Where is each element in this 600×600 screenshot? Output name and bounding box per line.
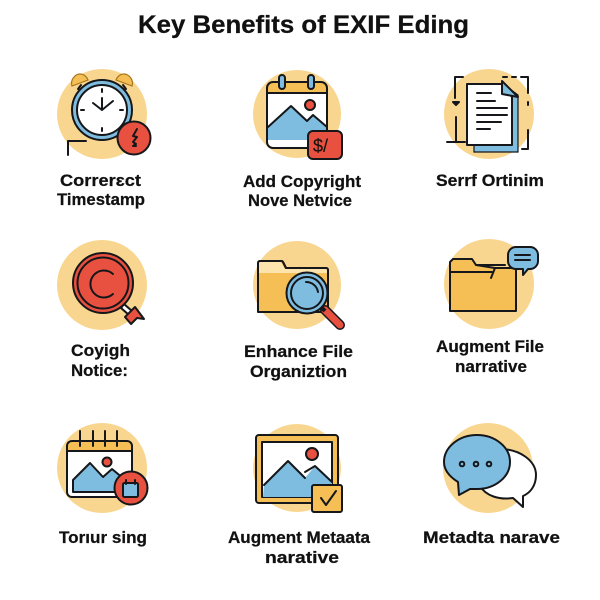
label: enhance file organization: Organiztion bbox=[250, 362, 347, 381]
panel: augment metadata narrative bbox=[228, 424, 371, 567]
panel: enhance file organization bbox=[244, 241, 353, 381]
icon: speech bubbles bbox=[443, 423, 536, 513]
label: correct timestamp: Timestamp bbox=[57, 190, 145, 209]
label: metadata narrative: Metadta narave bbox=[423, 528, 560, 547]
icon: folder with speech bubble bbox=[444, 239, 538, 329]
icon: calendar photo: $/ bbox=[313, 136, 328, 156]
label: correct timestamp: Correrɛct bbox=[60, 171, 141, 190]
panel: copyright notice bbox=[57, 240, 147, 380]
label: tourism: Torıur sing bbox=[59, 528, 147, 547]
panel: add copyright notice bbox=[243, 70, 361, 210]
label: add copyright notice: Nove Netvice bbox=[248, 191, 352, 210]
label: add copyright notice bbox=[243, 172, 361, 210]
icon: folder with magnifier bbox=[253, 241, 341, 329]
label: augment metadata narrative bbox=[228, 528, 371, 567]
label: augment file narrative bbox=[436, 337, 544, 376]
label: copyright notice: Coyigh bbox=[71, 341, 130, 360]
label: enhance file organization bbox=[244, 342, 353, 381]
label: augment metadata narrative: Augment Metaata bbox=[228, 528, 371, 547]
label: augment metadata narrative: narative bbox=[265, 548, 339, 567]
label: augment file narrative: narrative bbox=[455, 357, 527, 376]
label: correct timestamp bbox=[57, 171, 145, 209]
label: copyright notice bbox=[71, 341, 130, 380]
panel: correct timestamp bbox=[57, 69, 150, 209]
panel: augment file narrative bbox=[436, 239, 544, 376]
icon: documents bbox=[444, 69, 534, 159]
icon: calendar with badge bbox=[57, 423, 148, 513]
icon: framed photo with check bbox=[253, 424, 342, 512]
label: copyright notice: Notice: bbox=[71, 361, 128, 380]
panel: metadata narrative bbox=[423, 423, 560, 547]
panel: serp optimisation bbox=[436, 69, 544, 190]
title: Key Benefits of EXIF Eding bbox=[138, 11, 469, 39]
panel: tourism bbox=[57, 423, 148, 547]
icon: alarm clock bbox=[57, 69, 150, 159]
label: serp optimisation: Serrf Ortinim bbox=[436, 171, 544, 190]
label: add copyright notice: Add Copyright bbox=[243, 172, 361, 191]
label: augment file narrative: Augment File bbox=[436, 337, 544, 356]
icon: copyright seal bbox=[57, 240, 147, 330]
label: enhance file organization: Enhance File bbox=[244, 342, 353, 361]
